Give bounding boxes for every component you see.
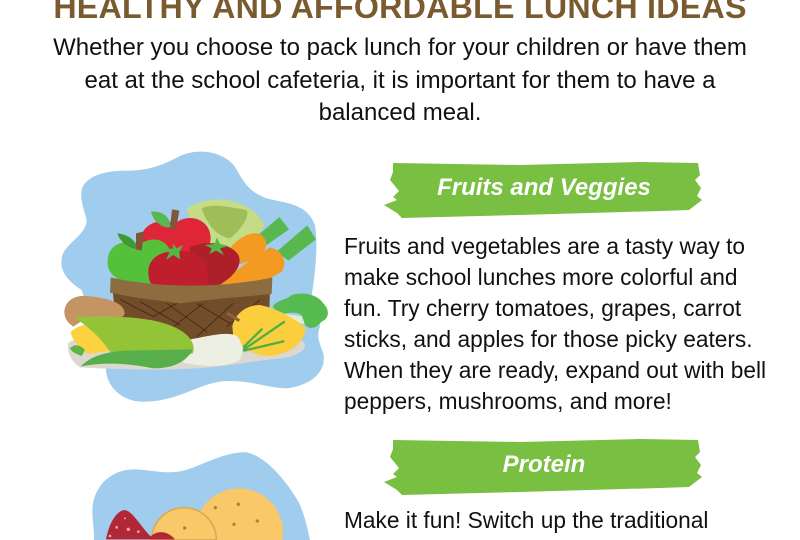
protein text: Make it fun! Switch up the traditional [344,507,708,533]
fruits and veggies text: When they are ready, expand out with bell [344,357,766,383]
fruits and veggies text: peppers, mushrooms, and more! [344,388,672,414]
shadow under vegetables [68,340,305,370]
lettuce [187,199,264,250]
intro text: eat at the school cafeteria, it is important for them to have a [84,67,716,94]
fruits and veggies text: sticks, and apples for those picky eaters. [344,326,753,352]
potato [64,296,125,327]
illustration: crackers and strawberries [92,452,310,540]
fruits and veggies text: fun. Try cherry tomatoes, grapes, carrot [344,295,741,321]
strawberries [106,510,175,539]
intro text: balanced meal. [319,99,481,126]
banner: Fruits and Veggies [384,162,702,218]
fruits and veggies text: Fruits and vegetables are a tasty way to [344,233,745,259]
basket [110,277,272,340]
intro text [53,34,747,126]
broccoli [273,294,328,328]
red apple [142,209,211,260]
blue blob background [61,152,324,402]
fruits and veggies text: make school lunches more colorful and [344,264,737,290]
corn [70,316,194,368]
banner heading: Fruits and Veggies: Fruits and Veggies [437,174,651,201]
tomatoes [148,237,240,287]
intro text: Whether you choose to pack lunch for your children or have them [53,34,747,61]
banner heading: Protein: Protein [503,451,585,478]
fruits and veggies text [344,233,766,414]
banner: Protein [384,439,702,495]
green apple [108,231,171,284]
carrots [216,217,316,286]
blue blob background [92,452,310,540]
daikon radish [183,322,284,366]
yellow pepper [226,305,306,356]
crackers [152,488,283,540]
